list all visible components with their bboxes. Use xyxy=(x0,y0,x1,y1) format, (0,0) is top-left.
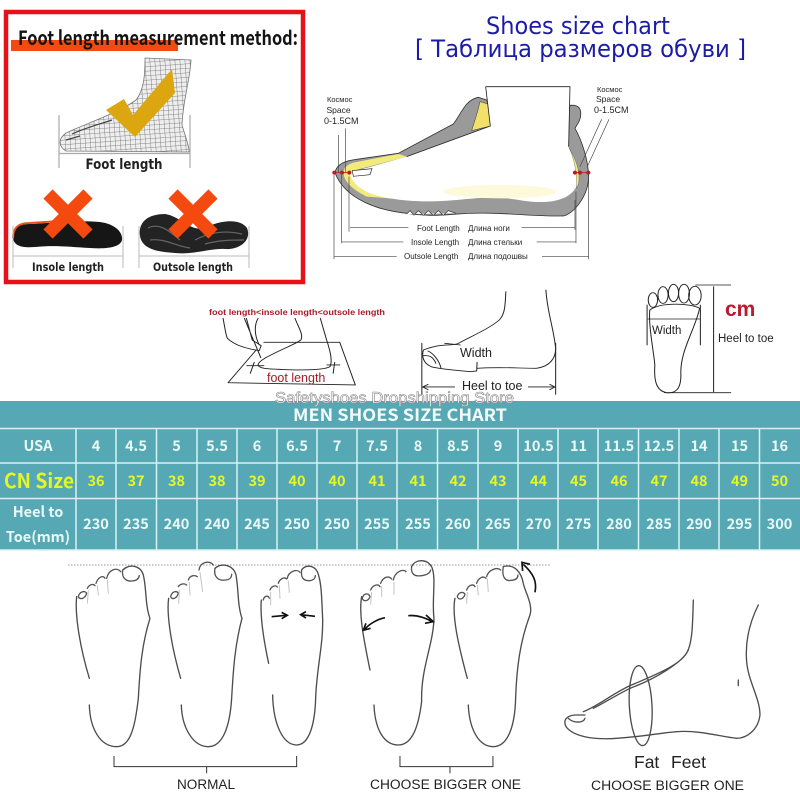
title xyxy=(415,12,746,63)
row: heel to toe lengths: 265 xyxy=(485,513,511,534)
row: heel to toe lengths: 255 xyxy=(364,513,390,534)
outsole length label: Outsole length xyxy=(153,260,233,274)
row: CN sizes: 41 xyxy=(368,470,386,491)
row: USA sizes: 7.5 xyxy=(366,435,388,456)
icon: bunion foot with upward arrow xyxy=(454,562,536,747)
fat feet caption: Fat xyxy=(634,752,659,772)
bracket: normal xyxy=(114,756,297,773)
row: USA sizes: 16 xyxy=(771,435,788,456)
foot length label: Foot length xyxy=(86,157,162,173)
row: heel to toe lengths: 270 xyxy=(526,513,551,534)
row: heel to toe lengths: 235 xyxy=(123,513,149,534)
row: CN sizes: 48 xyxy=(690,470,708,491)
normal caption: NORMAL xyxy=(177,777,235,792)
heel to toe caption: Heel to toe xyxy=(718,333,774,345)
row: USA sizes: 7 xyxy=(333,435,341,456)
shoe cross-section diagram: Insole Length xyxy=(411,238,459,247)
choose bigger caption: CHOOSE BIGGER ONE xyxy=(370,777,521,792)
row: USA sizes: 15 xyxy=(731,435,748,456)
row: USA sizes: 8 xyxy=(414,435,422,456)
icon: wireframe foot xyxy=(59,58,191,168)
row: heel to toe lengths: 290 xyxy=(686,513,712,534)
shoe cross-section diagram: Длина ноги xyxy=(468,224,510,233)
row: USA sizes: 6 xyxy=(253,435,261,456)
row: CN sizes: 40 xyxy=(328,470,346,491)
row: USA sizes: 10.5 xyxy=(523,435,554,456)
row: heel to toe lengths: 240 xyxy=(204,513,230,534)
title: Shoes size chart xyxy=(486,12,670,40)
row: CN sizes: 44 xyxy=(530,470,547,491)
icon: wrong mark over insole xyxy=(48,194,88,234)
icon: normal foot one xyxy=(76,566,150,747)
row: heel to toe lengths: 280 xyxy=(606,513,632,534)
cm unit label: cm xyxy=(725,298,755,321)
row: heel to toe lengths: 295 xyxy=(727,513,752,534)
row: USA sizes: 6.5 xyxy=(286,435,308,456)
shoe cross-section diagram: Foot Length xyxy=(417,224,460,233)
row: USA sizes: 11.5 xyxy=(604,435,634,456)
choose bigger caption: CHOOSE BIGGER ONE xyxy=(591,778,744,793)
fat feet caption: Feet xyxy=(671,752,706,772)
row: heel to toe lengths: Toe(mm) xyxy=(6,526,70,547)
row: USA sizes: 5 xyxy=(172,435,181,456)
row: USA sizes: 14 xyxy=(690,435,708,456)
row: heel to toe lengths: Heel to xyxy=(13,501,63,522)
row: CN sizes: 41 xyxy=(409,470,427,491)
store watermark: Safetyshoes Dropshipping Store xyxy=(275,390,514,407)
heading highlight bar xyxy=(11,40,178,51)
row: CN sizes: 49 xyxy=(731,470,748,491)
heading: Foot length measurement method: xyxy=(18,22,298,51)
row: CN sizes: 42 xyxy=(449,470,467,491)
row: heel to toe lengths: 245 xyxy=(244,513,270,534)
row: heel to toe lengths: 230 xyxy=(83,513,109,534)
row: CN sizes: 45 xyxy=(570,470,587,491)
row: USA sizes: 11 xyxy=(570,435,587,456)
row: heel to toe lengths: 275 xyxy=(566,513,591,534)
row: heel to toe lengths: 250 xyxy=(284,513,310,534)
diagram: tracing foot on paper xyxy=(209,307,385,385)
foot type comparison xyxy=(68,561,550,792)
fat feet diagram xyxy=(565,600,760,793)
shoe cross-section diagram: Space xyxy=(596,94,620,104)
icon: gold check mark xyxy=(106,69,175,137)
row: heel to toe lengths xyxy=(6,501,792,547)
row: CN sizes: 50 xyxy=(771,470,788,491)
row: CN sizes: 37 xyxy=(127,470,145,491)
shoe cross-section diagram: Космос xyxy=(597,85,623,94)
row: CN sizes: 46 xyxy=(610,470,628,491)
row: CN sizes: 38 xyxy=(208,470,226,491)
shoe cross-section diagram: Космос xyxy=(327,95,353,104)
row: CN sizes: CN Size xyxy=(4,465,74,494)
row: CN sizes: 47 xyxy=(650,470,668,491)
title: [ Таблица размеров обуви ] xyxy=(415,35,746,63)
shoe cross-section diagram xyxy=(324,85,629,261)
row: heel to toe lengths: 255 xyxy=(405,513,431,534)
row: CN sizes xyxy=(4,465,788,494)
width caption: Width xyxy=(460,346,492,360)
shoe cross-section diagram: Длина стельки xyxy=(468,238,522,247)
foot length caption: foot length xyxy=(267,371,325,385)
table title: MEN SHOES SIZE CHART xyxy=(293,401,507,426)
shoe cross-section diagram: 0-1.5CM xyxy=(594,105,629,115)
men shoes size table xyxy=(0,390,800,550)
row: USA sizes: 5.5 xyxy=(206,435,228,456)
row: heel to toe lengths: 240 xyxy=(164,513,189,534)
row: USA sizes: 4 xyxy=(92,435,101,456)
shoe cross-section diagram: Outsole Length xyxy=(404,252,458,261)
row: USA sizes: 8.5 xyxy=(447,435,469,456)
row: CN sizes: 40 xyxy=(288,470,306,491)
row: USA sizes: USA xyxy=(23,435,53,456)
icon: normal foot two xyxy=(168,562,242,747)
diagram: sole width and length xyxy=(647,284,774,393)
icon: outsole xyxy=(139,214,249,268)
insole length label: Insole length xyxy=(32,260,104,274)
length relation caption: foot length<insole length<outsole length xyxy=(209,307,385,317)
row: heel to toe lengths: 250 xyxy=(324,513,350,534)
heel to toe caption: Heel to toe xyxy=(462,379,523,393)
row: heel to toe lengths: 300 xyxy=(767,513,792,534)
shoe cross-section diagram: Длина подошвы xyxy=(468,252,528,261)
icon: wide foot with outward arrows xyxy=(361,561,434,745)
icon: narrow foot with inward arrows xyxy=(261,566,323,745)
bracket: choose bigger xyxy=(400,756,493,773)
panel: foot length measurement method xyxy=(6,12,303,282)
row: CN sizes: 38 xyxy=(168,470,185,491)
row: CN sizes: 39 xyxy=(248,470,266,491)
icon: wrong mark over outsole xyxy=(173,194,213,234)
row: USA sizes: 4.5 xyxy=(125,435,147,456)
row: CN sizes: 43 xyxy=(489,470,507,491)
row: heel to toe lengths: 260 xyxy=(445,513,471,534)
diagram: side view foot width and heel to toe xyxy=(422,290,556,394)
shoe cross-section diagram: 0-1.5CM xyxy=(324,116,359,126)
icon: insole xyxy=(13,220,123,268)
row: CN sizes: 36 xyxy=(87,470,105,491)
shoe cross-section diagram: Space xyxy=(326,105,351,115)
row: heel to toe lengths: 285 xyxy=(646,513,672,534)
row: USA sizes xyxy=(23,435,788,456)
row: USA sizes: 9 xyxy=(494,435,502,456)
width caption: Width xyxy=(652,325,681,337)
row: USA sizes: 12.5 xyxy=(644,435,674,456)
